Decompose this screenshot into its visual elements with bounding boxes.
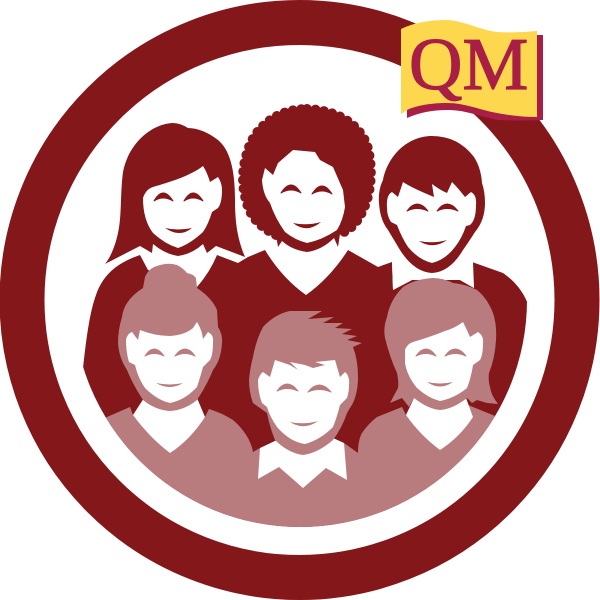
back row bodies xyxy=(80,250,535,540)
face xyxy=(126,322,213,403)
flag xyxy=(401,20,537,117)
neck xyxy=(406,398,473,450)
eyes xyxy=(145,349,195,356)
hair xyxy=(105,123,245,264)
mouth xyxy=(419,240,447,245)
person: back left xyxy=(105,123,245,264)
mouth xyxy=(290,421,318,426)
person: front left xyxy=(118,264,222,453)
group of six people xyxy=(80,107,535,540)
QM letters: QM xyxy=(409,24,528,106)
face xyxy=(258,360,349,444)
neck xyxy=(133,398,205,453)
neck xyxy=(392,262,474,290)
face xyxy=(387,182,476,263)
person: front right xyxy=(384,278,498,450)
person: front middle xyxy=(249,311,362,488)
curly hair xyxy=(241,107,373,252)
eyes xyxy=(154,193,203,201)
face xyxy=(405,322,483,401)
eyes xyxy=(281,185,332,194)
spiky hair and outline xyxy=(249,311,362,455)
shirt collar xyxy=(258,438,347,488)
hair xyxy=(384,278,498,410)
mouth xyxy=(427,382,453,386)
face xyxy=(143,166,222,248)
eyes xyxy=(416,349,466,356)
mouth xyxy=(156,383,183,387)
hair and outline xyxy=(379,136,485,273)
mouth xyxy=(165,228,192,233)
eyes xyxy=(407,204,458,211)
flag shadow xyxy=(407,35,543,120)
face xyxy=(262,150,345,243)
QM flag logo xyxy=(401,20,543,120)
person: back middle xyxy=(241,107,373,252)
person: back right xyxy=(379,136,485,290)
eyes xyxy=(277,384,331,392)
bun and hair xyxy=(118,264,222,411)
mouth xyxy=(293,222,321,228)
front row bodies xyxy=(106,405,495,527)
